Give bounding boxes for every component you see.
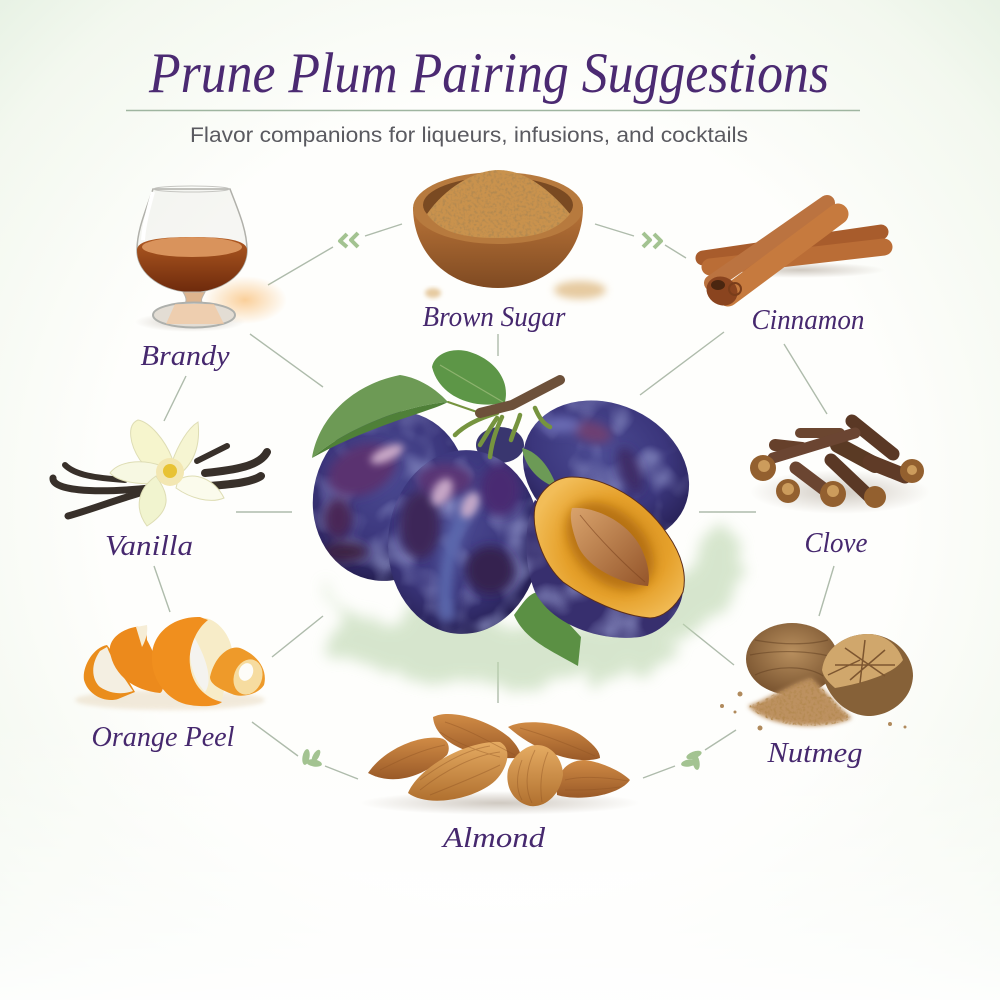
cut plum skin: [526, 500, 683, 638]
label: Orange Peel: Orange Peel: [92, 722, 235, 753]
back small plum: [476, 427, 524, 463]
label: Brown Sugar: Brown Sugar: [422, 302, 566, 333]
icon: cinnamon sticks: [701, 203, 885, 311]
label: Nutmeg: Nutmeg: [766, 738, 862, 769]
icon: clove pile: [750, 421, 930, 514]
peel curl 4: [210, 647, 265, 696]
icon: brandy glass: [135, 186, 287, 332]
almond right low: [557, 760, 630, 798]
peel curl 2: [110, 626, 163, 693]
almond front: [408, 742, 507, 801]
label: Cinnamon: Cinnamon: [752, 305, 864, 336]
small leaf: [522, 448, 557, 488]
connector lines: [154, 224, 834, 779]
icon: nutmeg: [720, 623, 913, 730]
label: Brandy: Brandy: [140, 341, 230, 372]
illustration: green watercolor wash: [320, 525, 747, 682]
nutmeg half: [822, 634, 913, 716]
front plum: [388, 450, 534, 634]
peel curl 3: [188, 618, 232, 700]
almond small front: [507, 745, 563, 806]
icon: vanilla flower and pods: [53, 420, 267, 526]
label: Vanilla: Vanilla: [105, 531, 193, 562]
left plum: [312, 411, 458, 581]
icon: almonds: [360, 714, 640, 815]
almond top: [433, 714, 521, 759]
title divider: [126, 110, 860, 112]
almond right back: [508, 722, 600, 760]
arrow leaves: [301, 233, 703, 770]
bottom leaf: [514, 592, 581, 666]
right plum: [522, 400, 690, 530]
icon: orange peel: [75, 617, 267, 710]
illustration: central plums: [312, 350, 690, 666]
large leaf: [312, 375, 448, 458]
nutmeg powder: [748, 678, 852, 726]
cut plum flesh: [534, 477, 684, 618]
title: Prune Plum Pairing Suggestions: [148, 42, 829, 105]
almond ridges: [380, 722, 628, 803]
label: Clove: Clove: [804, 528, 868, 559]
label: Almond: Almond: [441, 823, 546, 854]
almond left: [368, 738, 449, 779]
peel curl 1: [84, 645, 135, 700]
stems and twig: [448, 380, 560, 457]
icon: brown sugar bowl: [413, 170, 606, 299]
plum stone: [571, 508, 649, 586]
top leaf: [432, 350, 506, 405]
subtitle: Flavor companions for liqueurs, infusions, and cocktails: [190, 124, 748, 147]
